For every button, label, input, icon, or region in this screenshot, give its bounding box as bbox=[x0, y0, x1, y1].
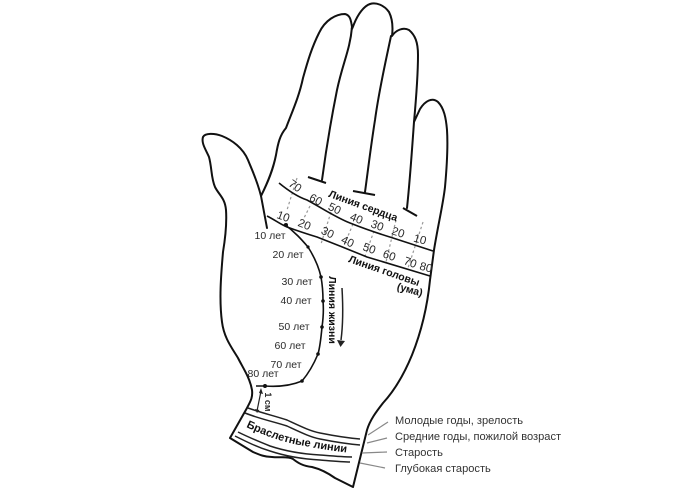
age labels on life line: 30 лет bbox=[281, 276, 313, 288]
age labels on life line: 50 лет bbox=[278, 321, 310, 333]
head line scale numbers: 20 bbox=[296, 217, 312, 233]
heart line scale numbers: 20 bbox=[390, 225, 406, 241]
head line scale numbers: 80 bbox=[418, 261, 434, 276]
head line scale numbers: 40 bbox=[339, 234, 356, 250]
heart line scale numbers: 40 bbox=[348, 211, 364, 227]
heart line scale numbers: 30 bbox=[369, 218, 385, 234]
head line scale numbers: 30 bbox=[319, 225, 336, 241]
bracelet legend: Молодые годы, зрелость bbox=[395, 415, 523, 427]
hand outline bbox=[203, 3, 447, 487]
bracelet legend bbox=[395, 415, 561, 475]
head line scale numbers bbox=[275, 209, 434, 276]
head line title: Линия головы bbox=[347, 253, 421, 289]
heart line scale numbers: 70 bbox=[286, 178, 303, 195]
one centimetre measure: 1 см bbox=[263, 392, 273, 412]
head line scale numbers: 50 bbox=[361, 241, 377, 257]
bracelet lines title bbox=[246, 427, 350, 453]
one centimetre measure bbox=[255, 388, 273, 413]
head line scale numbers: 60 bbox=[381, 248, 397, 264]
bracelet legend: Старость bbox=[395, 447, 443, 459]
heart line scale numbers: 50 bbox=[326, 201, 343, 217]
dotted age guides bbox=[287, 178, 423, 268]
age labels on life line bbox=[247, 230, 313, 380]
heart line scale numbers: 10 bbox=[412, 233, 428, 248]
age labels on life line: 80 лет bbox=[247, 368, 279, 380]
age labels on life line: 60 лет bbox=[274, 340, 306, 352]
palm line diagram: Браслетные линии bbox=[246, 420, 347, 452]
bracelet legend: Средние годы, пожилой возраст bbox=[395, 431, 561, 443]
heart line scale numbers bbox=[286, 178, 428, 248]
age labels on life line: 40 лет bbox=[280, 295, 312, 307]
age labels on life line: 10 лет bbox=[254, 230, 286, 242]
arrow along life line bbox=[337, 288, 345, 347]
head line bbox=[267, 216, 430, 276]
finger T-bars bbox=[308, 177, 417, 216]
age labels on life line: 20 лет bbox=[272, 249, 304, 261]
head line subtitle: (ума) bbox=[396, 281, 424, 299]
heart line bbox=[279, 183, 433, 251]
heart line scale numbers: 60 bbox=[307, 192, 324, 209]
bracelet legend: Глубокая старость bbox=[395, 463, 491, 475]
bracelet lines bbox=[235, 408, 360, 462]
age labels on life line: 70 лет bbox=[270, 359, 302, 371]
life line title: Линия жизни bbox=[326, 276, 338, 344]
life line with age markers bbox=[256, 223, 325, 388]
bracelet leader lines bbox=[360, 422, 388, 468]
head line scale numbers: 10 bbox=[275, 209, 291, 225]
head line scale numbers: 70 bbox=[402, 255, 418, 271]
heart line title: Линия сердца bbox=[327, 188, 399, 224]
